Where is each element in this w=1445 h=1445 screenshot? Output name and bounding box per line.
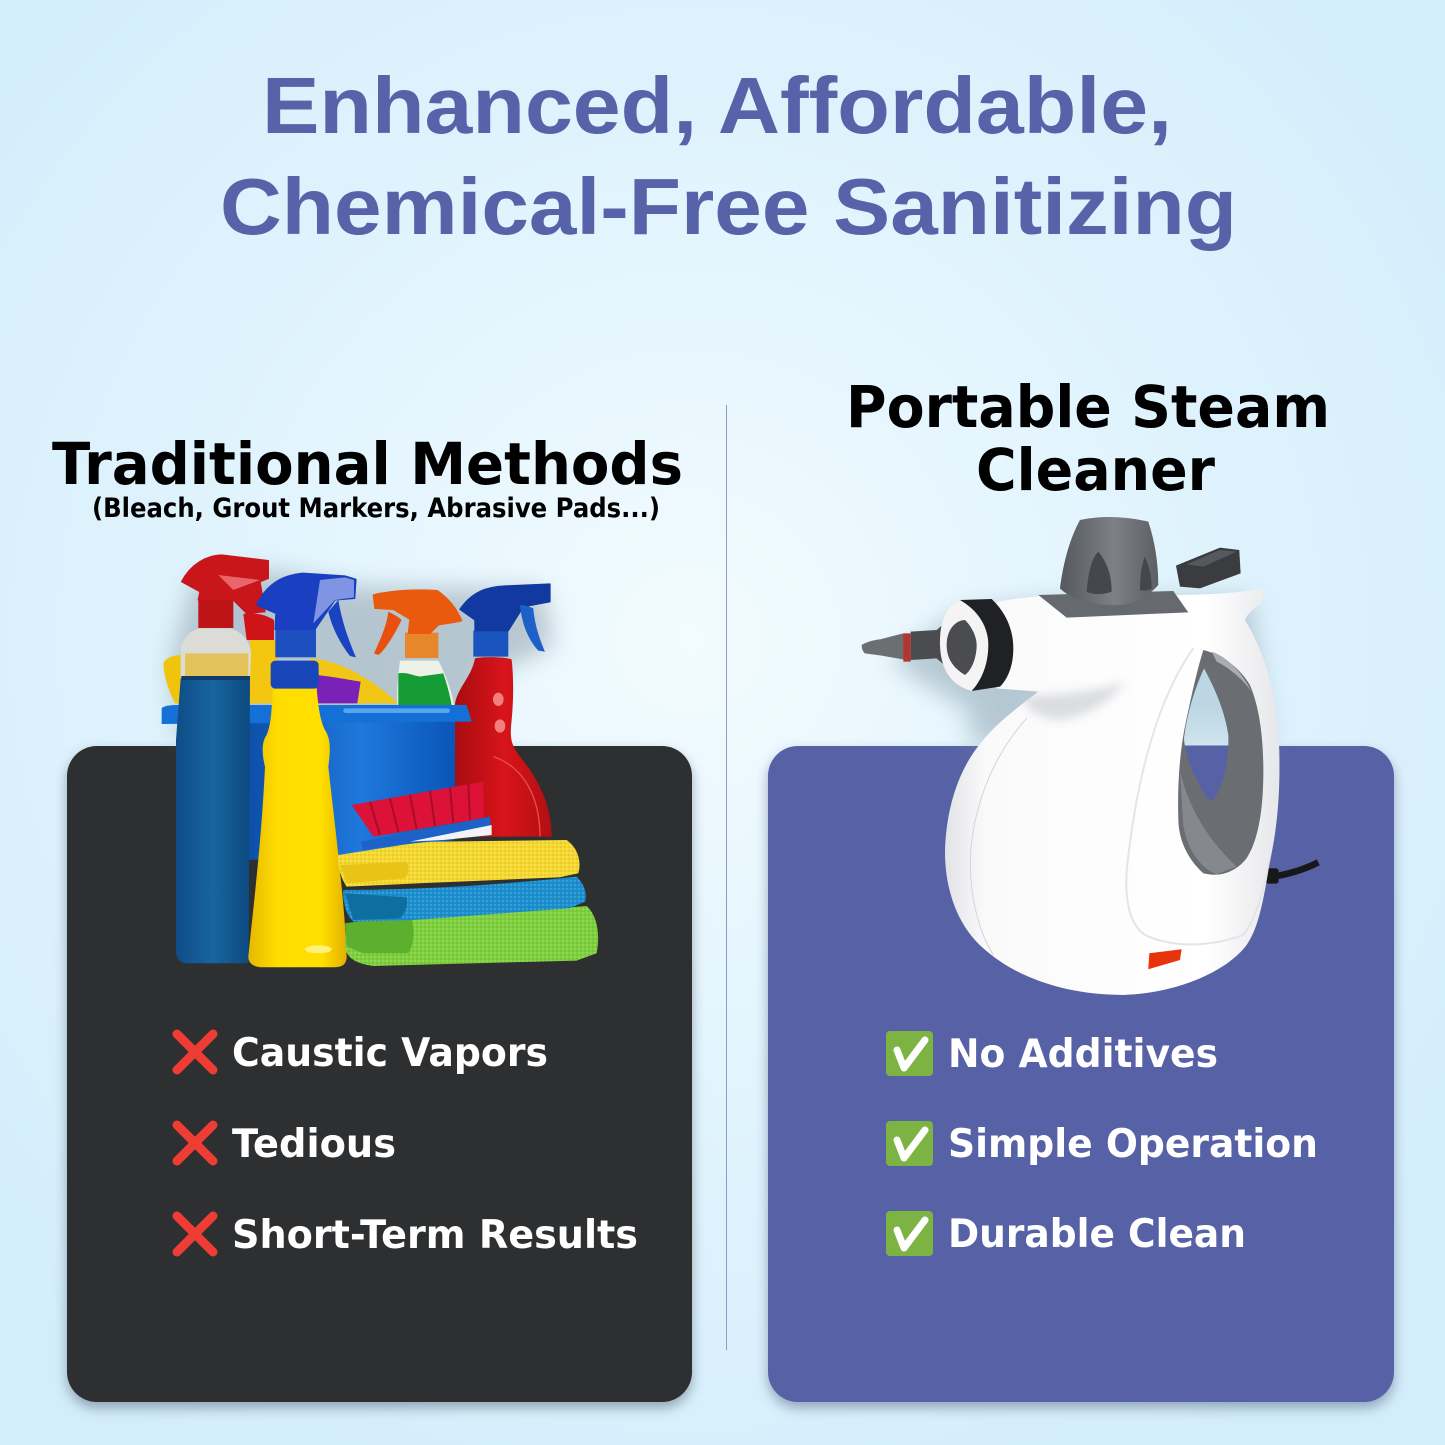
divider line bbox=[726, 405, 728, 1350]
item: simple operation: Simple Operation bbox=[948, 1122, 1318, 1167]
yellow spray bottle bbox=[248, 573, 356, 967]
item: short-term results: Short-Term Results bbox=[232, 1213, 638, 1258]
panel: portable steam cleaner bbox=[768, 746, 1394, 1408]
item: caustic vapors: Caustic Vapors bbox=[232, 1031, 548, 1076]
icon: cross bbox=[177, 1216, 213, 1252]
power cord bbox=[1266, 862, 1318, 884]
item: tedious: Tedious bbox=[232, 1122, 396, 1167]
body bbox=[945, 588, 1279, 995]
heading: portable steam cleaner bbox=[846, 373, 1330, 504]
green bottle bbox=[373, 590, 462, 705]
icon: cross bbox=[177, 1125, 213, 1161]
lock button bbox=[1176, 548, 1241, 588]
bucket bbox=[162, 705, 472, 860]
red indicator light bbox=[1148, 949, 1182, 969]
icon: check bbox=[886, 1031, 933, 1076]
green cloth bbox=[345, 906, 598, 966]
handle panel contour bbox=[1126, 648, 1269, 944]
illustration: cleaning bottles, bucket and cloths bbox=[162, 555, 598, 967]
purple brush bbox=[317, 675, 361, 703]
icon: check bbox=[886, 1211, 933, 1256]
shading under neck bbox=[1020, 682, 1127, 720]
nozzle bbox=[862, 618, 968, 670]
item: durable clean: Durable Clean bbox=[948, 1212, 1246, 1257]
title: Chemical-Free Sanitizing bbox=[220, 162, 1237, 251]
title bbox=[220, 61, 1237, 251]
heading: traditional methods: (Bleach, Grout Markers, Abrasive Pads...) bbox=[92, 493, 660, 524]
panel: traditional methods bbox=[67, 746, 692, 1408]
yellow pail handle bbox=[163, 655, 183, 703]
nozzle collar bbox=[940, 599, 1013, 691]
clear spray bottle bbox=[176, 555, 268, 963]
title: Enhanced, Affordable, bbox=[262, 61, 1172, 150]
back yellow bottle bbox=[243, 613, 283, 703]
stacked cloths bbox=[338, 840, 598, 966]
list: benefits bbox=[886, 1031, 1318, 1257]
item: no additives: No Additives bbox=[948, 1032, 1218, 1077]
blue cloth bbox=[343, 877, 586, 922]
red bottle bbox=[455, 584, 552, 837]
illustration: portable steam cleaner bbox=[862, 517, 1318, 995]
steam knob bbox=[1060, 517, 1158, 605]
heading: traditional methods: Traditional Methods bbox=[52, 430, 683, 498]
heading: portable steam cleaner: Portable Steam bbox=[846, 373, 1330, 441]
list: drawbacks bbox=[177, 1031, 638, 1258]
icon: cross bbox=[177, 1034, 213, 1070]
red scrub brush bbox=[352, 782, 492, 850]
yellow cloth bbox=[338, 840, 580, 887]
body seam bbox=[970, 718, 1027, 955]
heading: portable steam cleaner: Cleaner bbox=[976, 436, 1215, 504]
handle grey grip bbox=[1178, 650, 1263, 875]
lid plate bbox=[1038, 591, 1188, 618]
handle opening bbox=[1184, 668, 1228, 800]
icon: check bbox=[886, 1121, 933, 1166]
